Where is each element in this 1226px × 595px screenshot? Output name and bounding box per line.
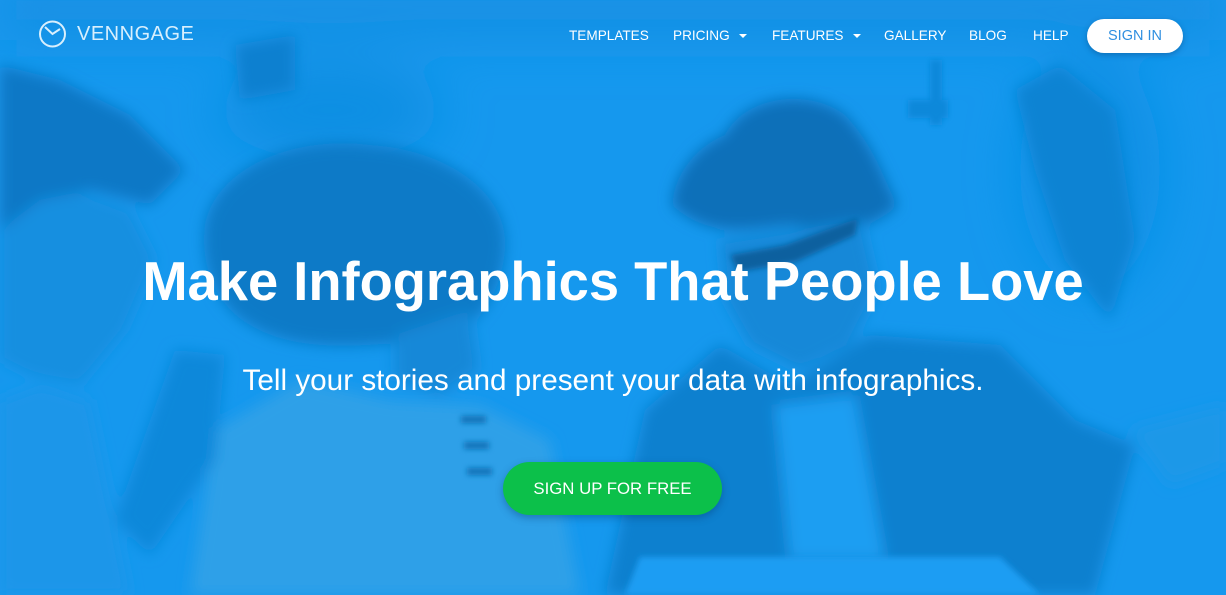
nav link: help: HELP <box>1033 28 1069 43</box>
nav link: blog: BLOG <box>969 28 1007 43</box>
navigation <box>569 18 1186 58</box>
right plant <box>1015 65 1135 320</box>
shirt <box>605 335 1135 595</box>
icon: clock logo <box>39 20 66 48</box>
title: Make Infographics That People Love <box>142 251 1084 312</box>
sign up button <box>503 462 722 515</box>
nav link: features: FEATURES <box>772 28 844 43</box>
woman face <box>395 310 478 395</box>
nav link: pricing: PRICING <box>673 28 730 43</box>
woman top <box>190 380 580 595</box>
nav link: templates: TEMPLATES <box>569 28 649 43</box>
logo <box>39 20 194 48</box>
woman hair <box>204 143 505 346</box>
subtitle: Tell your stories and present your data with infographics. <box>243 364 983 397</box>
right man hat <box>672 99 898 229</box>
right man face <box>720 220 878 370</box>
sign up button: SIGN UP FOR FREE <box>533 479 692 498</box>
left man <box>0 185 155 385</box>
sign in button <box>1087 19 1183 53</box>
logo wordmark: VENNGAGE <box>77 23 194 45</box>
nav link: gallery: GALLERY <box>884 28 946 43</box>
sign in button: SIGN IN <box>1108 28 1162 44</box>
